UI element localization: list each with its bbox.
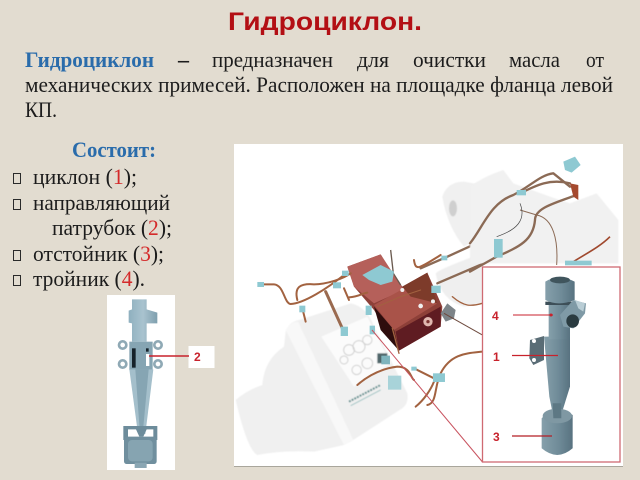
text block: description: масла <box>509 47 560 72</box>
callout lines to inset <box>372 330 482 462</box>
label: part 1 <box>493 350 558 364</box>
label: part 3 <box>493 430 552 444</box>
parts list: тройник (4). <box>33 266 145 291</box>
text block: description: механических примесей. Расположен на площадке фланца левой <box>25 72 613 97</box>
parts list <box>14 164 172 291</box>
text block: description: КП. <box>25 97 57 122</box>
parts list: направляющий <box>33 190 170 215</box>
gearbox housing <box>236 182 482 455</box>
title: Гидроциклон. <box>228 8 422 36</box>
label: part 4 <box>492 309 553 323</box>
parts list: циклон (1); <box>33 164 137 189</box>
text block: description: – <box>177 47 190 72</box>
pipe work, upper right <box>470 157 618 272</box>
parts list: отстойник (3); <box>33 241 164 266</box>
text block: description: предназначен <box>212 47 333 72</box>
parts list: патрубок (2); <box>52 215 172 240</box>
inset: hydrocyclone <box>482 267 620 462</box>
heading: composition: Состоит: <box>72 137 156 162</box>
callout: part 2 <box>149 346 214 368</box>
text block: description <box>25 47 613 122</box>
label: part 3: 3 <box>493 430 500 444</box>
label: part 4: 4 <box>492 309 499 323</box>
label: part 1: 1 <box>493 350 500 364</box>
pipe work and hydraulic block <box>257 240 484 407</box>
panel: gearbox assembly photo <box>234 144 623 467</box>
text block: description: очистки <box>413 47 486 72</box>
text block: description: Гидроциклон <box>25 47 154 72</box>
text block: description: для <box>357 47 389 72</box>
figure: cyclone cross-section <box>107 295 214 470</box>
text block: description: от <box>586 47 604 72</box>
callout: part 2: 2 <box>194 350 201 364</box>
